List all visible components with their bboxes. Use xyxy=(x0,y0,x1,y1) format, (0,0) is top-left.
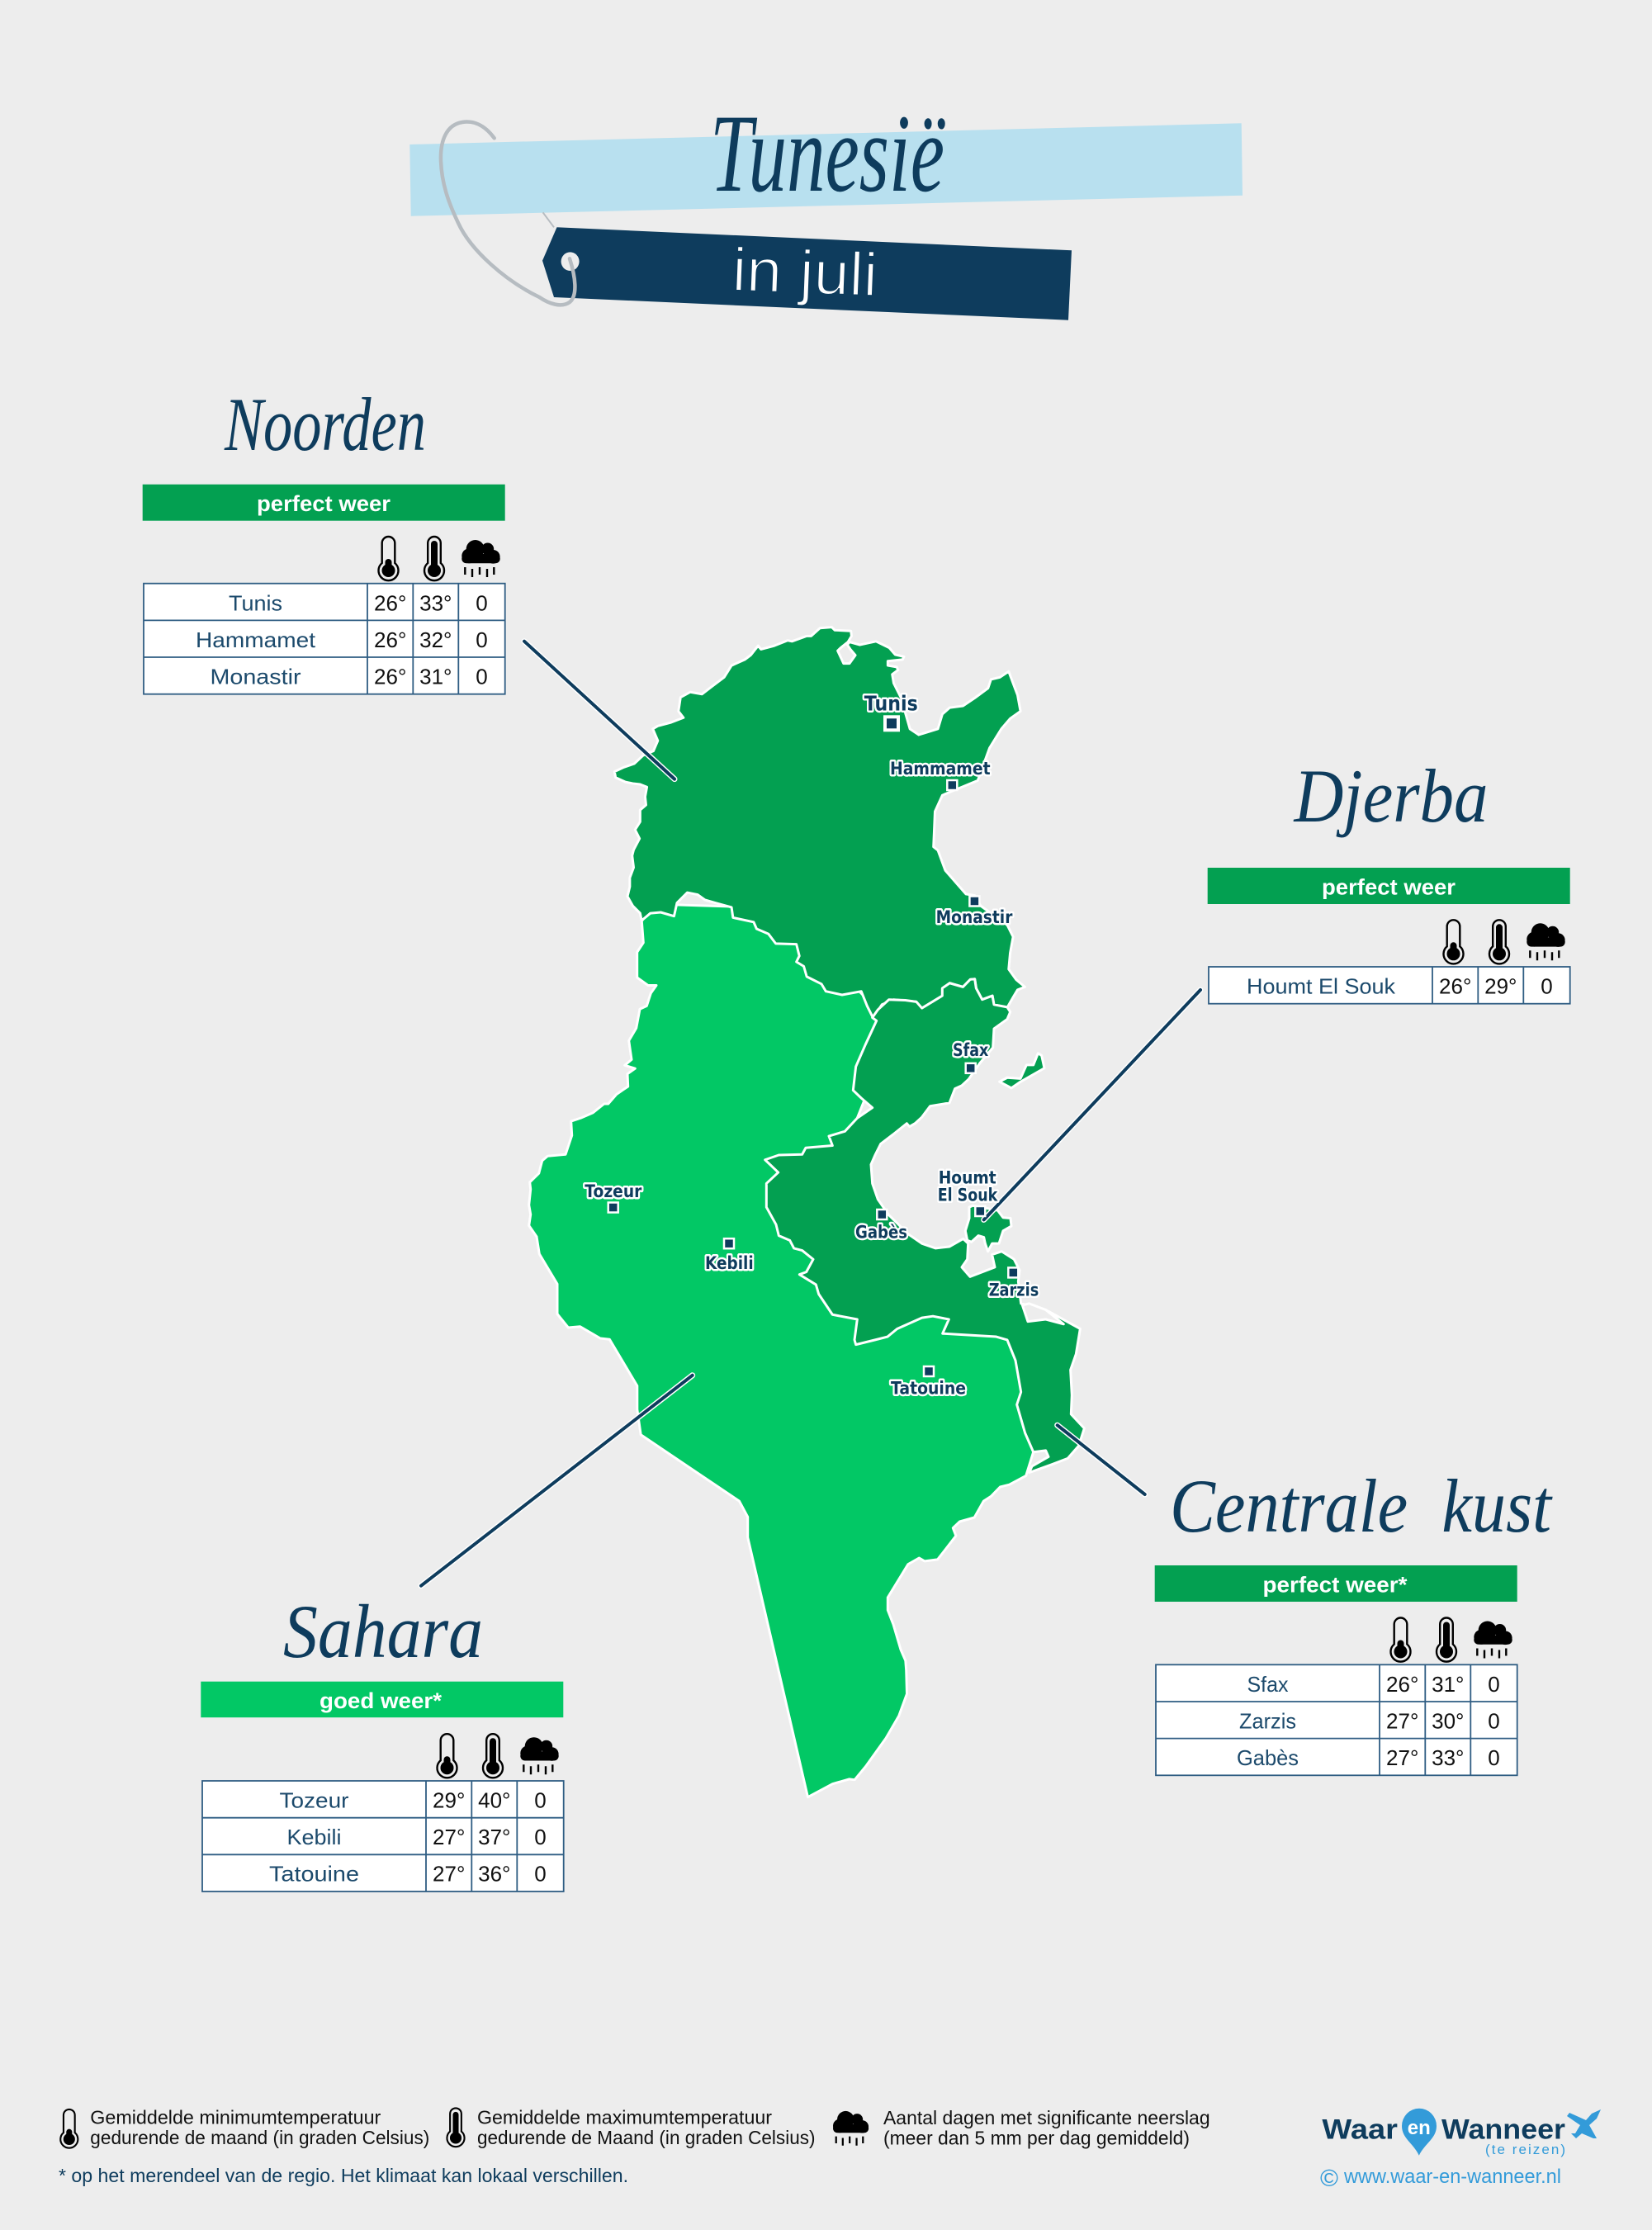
table: 27° xyxy=(433,1825,465,1849)
legend text: minimum temperature xyxy=(90,2107,429,2148)
city labels: Tatouine xyxy=(891,1379,966,1399)
icons xyxy=(378,537,500,580)
table: 36° xyxy=(478,1861,510,1886)
tag ring xyxy=(441,122,575,305)
city labels: Sfax xyxy=(953,1040,989,1060)
table: 29° xyxy=(1484,974,1517,999)
city labels: Tozeur xyxy=(585,1181,642,1201)
city labels xyxy=(585,692,1039,1399)
price tag: in juli: in juli xyxy=(731,235,879,309)
table xyxy=(1209,967,1570,1004)
heading: Centrale kust: Centrale kust xyxy=(1170,1464,1553,1548)
city labels: Tunis xyxy=(864,692,918,716)
title banner: Tunesië xyxy=(409,92,1243,216)
table xyxy=(202,1781,564,1891)
table: 29° xyxy=(433,1788,465,1813)
table: Sfax xyxy=(1247,1672,1288,1697)
region: Centrale kust xyxy=(765,979,1084,1473)
legend text: rain: (meer dan 5 mm per dag gemiddeld) xyxy=(883,2128,1190,2149)
icons xyxy=(1390,1618,1512,1662)
rating bar xyxy=(1155,1565,1517,1602)
string to tag xyxy=(543,212,554,227)
table: 30° xyxy=(1432,1708,1464,1733)
table: 0 xyxy=(1541,974,1553,999)
table: 26° xyxy=(374,590,406,615)
table: 0 xyxy=(476,664,488,689)
logo: Waar en Wanneer: en xyxy=(1408,2117,1431,2139)
table: 0 xyxy=(1488,1708,1500,1733)
table: Gabès xyxy=(1237,1745,1299,1770)
table: 31° xyxy=(1432,1672,1464,1697)
city labels: Houmt xyxy=(939,1167,996,1187)
region: Kerkennah islands xyxy=(1000,1053,1044,1088)
table xyxy=(144,584,505,694)
table: 0 xyxy=(476,590,488,615)
city labels: Monastir xyxy=(936,907,1013,927)
logo: Waar en Wanneer: Wanneer xyxy=(1441,2114,1565,2146)
heading: Djerba: Djerba xyxy=(1293,754,1488,838)
panel: Noorden xyxy=(143,382,505,694)
title banner: Tunesië: Tunesië xyxy=(710,92,945,215)
rating bar xyxy=(201,1682,563,1717)
legend text: rain xyxy=(883,2107,1210,2149)
table: Kebili xyxy=(287,1825,342,1849)
table: 27° xyxy=(433,1861,465,1886)
website: © xyxy=(1320,2166,1338,2192)
website: www.waar-en-wanneer.nl xyxy=(1343,2166,1561,2188)
table: 0 xyxy=(534,1788,547,1813)
table: Tatouine xyxy=(269,1861,359,1886)
table: 0 xyxy=(534,1861,547,1886)
panel: Djerba xyxy=(1208,754,1570,1004)
table: 0 xyxy=(534,1825,547,1849)
price tag: in juli xyxy=(542,227,1072,320)
icon: minimum temperature xyxy=(60,2109,78,2148)
rating bar: perfect weer xyxy=(1322,874,1456,899)
region: Sahara xyxy=(529,904,1048,1797)
table: 0 xyxy=(1488,1672,1500,1697)
table: Monastir xyxy=(210,664,301,689)
rating bar: goed weer* xyxy=(320,1688,443,1713)
table: Zarzis xyxy=(1239,1708,1296,1733)
heading: Noorden: Noorden xyxy=(224,382,426,466)
table: 32° xyxy=(419,627,452,652)
footnote: * op het merendeel van de regio. Het klimaat kan lokaal verschillen. xyxy=(59,2165,628,2186)
city labels: Zarzis xyxy=(989,1280,1039,1300)
rating bar: perfect weer* xyxy=(1263,1572,1408,1597)
table: 33° xyxy=(419,590,452,615)
table: Hammamet xyxy=(196,627,316,652)
table: 31° xyxy=(419,664,452,689)
table: 0 xyxy=(476,627,488,652)
icons xyxy=(438,1734,559,1778)
rating bar: perfect weer xyxy=(257,491,391,516)
legend text: maximum temperature: Gemiddelde maximumtemperatuur xyxy=(477,2107,772,2128)
leader lines xyxy=(421,642,1200,1586)
legend text: minimum temperature: gedurende de maand (in graden Celsius) xyxy=(90,2127,429,2148)
logo: Waar en Wanneer: Waar xyxy=(1322,2114,1398,2146)
city markers xyxy=(608,717,1018,1376)
table: 26° xyxy=(1439,974,1471,999)
map of Tunisia xyxy=(529,627,1084,1797)
legend text: maximum temperature xyxy=(477,2107,816,2148)
city labels: El Souk xyxy=(938,1186,998,1205)
icon: rain xyxy=(833,2111,869,2146)
logo: Waar en Wanneer xyxy=(1322,2109,1601,2157)
city labels: Kebili xyxy=(705,1253,754,1273)
table: 37° xyxy=(478,1825,510,1849)
panel: Centrale kust xyxy=(1155,1464,1553,1775)
rating bar xyxy=(1208,868,1570,904)
table: Tozeur xyxy=(279,1788,349,1813)
city labels: Gabès xyxy=(855,1223,907,1243)
rating bar xyxy=(143,485,505,521)
city labels: Hammamet xyxy=(890,759,991,779)
legend xyxy=(60,2107,1210,2149)
icon: maximum temperature xyxy=(447,2108,465,2147)
table: 26° xyxy=(1386,1672,1418,1697)
table: 26° xyxy=(374,627,406,652)
legend text: rain: Aantal dagen met significante neerslag xyxy=(883,2107,1210,2128)
table: 0 xyxy=(1488,1745,1500,1770)
table: Tunis xyxy=(229,590,282,615)
icons xyxy=(1443,920,1565,963)
table: 40° xyxy=(478,1788,510,1813)
table: 33° xyxy=(1432,1745,1464,1770)
panel: Sahara xyxy=(201,1589,564,1891)
table: 27° xyxy=(1386,1745,1418,1770)
table: Houmt El Souk xyxy=(1247,974,1396,999)
table: 27° xyxy=(1386,1708,1418,1733)
legend text: maximum temperature: gedurende de Maand (in graden Celsius) xyxy=(477,2127,816,2148)
region: Noorden xyxy=(614,627,1025,1018)
table xyxy=(1156,1664,1517,1775)
heading: Sahara: Sahara xyxy=(283,1589,483,1674)
region: Djerba island xyxy=(965,1205,1011,1252)
legend text: minimum temperature: Gemiddelde minimumtemperatuur xyxy=(90,2107,381,2128)
logo: Waar en Wanneer: (te reizen) xyxy=(1485,2142,1565,2157)
table: 26° xyxy=(374,664,406,689)
